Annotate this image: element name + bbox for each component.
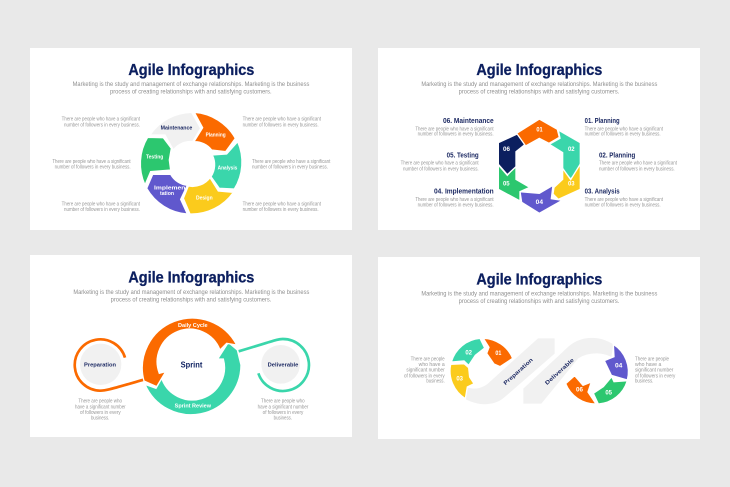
- label: deliverable: Deliverable: [544, 358, 576, 387]
- item: 01 planning: [585, 118, 663, 138]
- item: 05 testing: There are people who have a significant: [401, 161, 479, 167]
- band: preparation: [465, 338, 555, 404]
- label: sprint review: Sprint Review: [175, 404, 212, 410]
- label: maintenance: Maintenance: [161, 125, 192, 131]
- item: 02 planning: number of followers in every business.: [599, 166, 675, 172]
- segment: 01: [483, 338, 513, 367]
- subtitle: Marketing is the study and management of exchange relationships. Marketing is the business: [73, 82, 309, 88]
- note: lower right: There are people who have a significant: [243, 201, 321, 207]
- number: 06: 06: [503, 147, 511, 153]
- title: Agile Infographics: [476, 271, 603, 288]
- subtitle: Marketing is the study and management of exchange relationships. Marketing is the business: [73, 290, 309, 296]
- number: 04: 04: [615, 363, 623, 369]
- note: right: [634, 356, 675, 385]
- panel: sprint diagram: [30, 255, 352, 437]
- segment: 04: [520, 185, 562, 213]
- note: lower left: There are people who have a significant: [62, 201, 140, 207]
- item: 01 planning: 01. Planning: [585, 118, 620, 125]
- subtitle: process of creating relationships with and satisfying customers.: [459, 299, 620, 305]
- label: implementation: Implemen-: [154, 185, 188, 191]
- note: middle right: number of followers in every business.: [252, 165, 328, 171]
- label: preparation: Preparation: [503, 357, 535, 387]
- hexagon chart: [498, 119, 580, 213]
- segment: 03: [450, 364, 474, 399]
- label: analysis: Analysis: [218, 166, 237, 172]
- note: lower left: [62, 201, 140, 213]
- note: lower left: number of followers in every business.: [64, 207, 140, 213]
- note: lower right: [243, 201, 321, 213]
- note: upper right: [243, 117, 321, 128]
- note: lower right: number of followers in every business.: [243, 207, 319, 213]
- note: preparation: have a significant number: [75, 404, 126, 410]
- note: middle left: [52, 159, 131, 171]
- note: right: significant number: [635, 368, 673, 374]
- segment: 03: [553, 164, 580, 199]
- item: 05 testing: [401, 153, 479, 172]
- number: 02: 02: [568, 147, 575, 153]
- segment: 06: [566, 376, 596, 404]
- item: 06 maintenance: [415, 118, 494, 138]
- donut chart: [140, 112, 242, 214]
- label: planning: Planning: [206, 133, 226, 139]
- note: right: business.: [635, 379, 654, 385]
- panel: hexagon cycle: [378, 48, 700, 230]
- note: upper left: There are people who have a significant: [62, 117, 140, 123]
- label: sprint: Sprint: [181, 361, 203, 370]
- label: daily cycle: Daily Cycle: [178, 323, 208, 329]
- label: design: Design: [196, 196, 213, 202]
- note: right: There are people: [635, 356, 669, 362]
- segment: testing: [140, 137, 171, 185]
- note: middle left: There are people who have a significant: [52, 159, 131, 165]
- label: deliverable: Deliverable: [268, 363, 298, 369]
- note: middle left: number of followers in every business.: [55, 165, 131, 171]
- note: left: [404, 356, 445, 385]
- note: right: who have a: [634, 362, 662, 368]
- note: left: of followers in every: [404, 373, 445, 379]
- note: left: There are people: [411, 356, 445, 362]
- subtitle: Marketing is the study and management of exchange relationships. Marketing is the business: [421, 82, 657, 88]
- segment: 05: [498, 165, 530, 201]
- note: right: of followers in every: [635, 373, 675, 379]
- segment: implementation: [147, 174, 187, 214]
- note: upper left: [62, 117, 140, 128]
- panel: infinity loop: [378, 257, 700, 439]
- note: upper left: number of followers in every business.: [64, 122, 140, 128]
- item: 06 maintenance: 06. Maintenance: [443, 118, 494, 125]
- subtitle: [73, 82, 309, 95]
- item: 05 testing: 05. Testing: [447, 153, 479, 160]
- segment: 02: [549, 130, 580, 179]
- item: 03 analysis: There are people who have a significant: [585, 197, 663, 203]
- subtitle: [421, 82, 657, 95]
- note: preparation: [75, 399, 126, 422]
- label: implementation: [154, 185, 188, 197]
- item: 02 planning: There are people who have a significant: [599, 161, 677, 167]
- item: 01 planning: There are people who have a significant: [585, 126, 663, 132]
- note: left: business.: [426, 379, 445, 385]
- item: 04 implementation: number of followers in every business.: [418, 203, 494, 209]
- note: preparation: business.: [91, 416, 110, 422]
- preparation circle and connector: [75, 339, 145, 391]
- note: deliverable: have a significant number: [258, 404, 308, 410]
- item: 03 analysis: number of followers in every business.: [585, 203, 661, 209]
- label: preparation: Preparation: [84, 363, 117, 369]
- note: deliverable: business.: [274, 416, 292, 422]
- segment: 02: [451, 338, 485, 365]
- item: 04 implementation: 04. Implementation: [434, 189, 494, 196]
- title: Agile Infographics: [128, 62, 255, 79]
- item: 03 analysis: [585, 189, 663, 209]
- arrow: daily cycle: [142, 318, 237, 387]
- note: deliverable: There are people who: [261, 399, 305, 405]
- note: left: who have a: [418, 362, 445, 368]
- item: 02 planning: [599, 153, 677, 172]
- label: testing: Testing: [146, 155, 163, 161]
- label: implementation: tation: [160, 191, 175, 197]
- note: upper right: number of followers in every business.: [243, 122, 319, 128]
- subtitle: process of creating relationships with and satisfying customers.: [111, 297, 272, 303]
- segment: analysis: [211, 142, 242, 189]
- number: 05: 05: [605, 390, 613, 396]
- item: 06 maintenance: number of followers in every business.: [418, 132, 494, 138]
- arrow: sprint review: [145, 342, 241, 415]
- note: deliverable: [258, 399, 308, 422]
- number: 01: 01: [536, 128, 543, 134]
- deliverable circle and connector: [239, 339, 309, 391]
- number: 06: 06: [576, 388, 584, 394]
- segment: 04: [604, 344, 628, 380]
- title: Agile Infographics: [476, 62, 603, 79]
- title: Agile Infographics: [128, 270, 255, 287]
- subtitle: [73, 290, 309, 303]
- subtitle: process of creating relationships with and satisfying customers.: [110, 89, 272, 95]
- subtitle: Marketing is the study and management of exchange relationships. Marketing is the business: [421, 291, 657, 297]
- note: deliverable: of followers in every: [263, 410, 303, 416]
- segment: design: [183, 178, 233, 214]
- number: 03: 03: [568, 182, 575, 188]
- number: 04: 04: [536, 200, 544, 206]
- item: 04 implementation: [415, 189, 494, 209]
- item: 01 planning: number of followers in every business.: [585, 132, 661, 138]
- item: 04 implementation: There are people who have a significant: [415, 197, 494, 203]
- number: 03: 03: [456, 377, 464, 383]
- item: 03 analysis: 03. Analysis: [585, 189, 620, 196]
- segment: maintenance: [150, 112, 201, 150]
- panel: circular agile cycle: [30, 48, 352, 230]
- item: 05 testing: number of followers in every business.: [403, 166, 479, 172]
- item: 06 maintenance: There are people who have a significant: [415, 126, 494, 132]
- note: middle right: [252, 159, 331, 171]
- segment: 01: [517, 119, 559, 146]
- segment: 06: [498, 133, 525, 175]
- number: 02: 02: [465, 351, 473, 357]
- note: middle right: There are people who have a significant: [252, 159, 331, 165]
- number: 01: 01: [495, 351, 502, 357]
- item: 02 planning: 02. Planning: [599, 153, 635, 160]
- subtitle: [421, 291, 657, 305]
- segment: 05: [593, 377, 627, 404]
- note: left: significant number: [406, 368, 445, 374]
- note: preparation: of followers in every: [80, 410, 121, 416]
- subtitle: process of creating relationships with and satisfying customers.: [459, 89, 620, 95]
- segment: planning: [194, 112, 235, 152]
- band: deliverable: [523, 338, 613, 404]
- note: upper right: There are people who have a significant: [243, 117, 321, 123]
- number: 05: 05: [503, 182, 510, 188]
- note: preparation: There are people who: [78, 399, 122, 405]
